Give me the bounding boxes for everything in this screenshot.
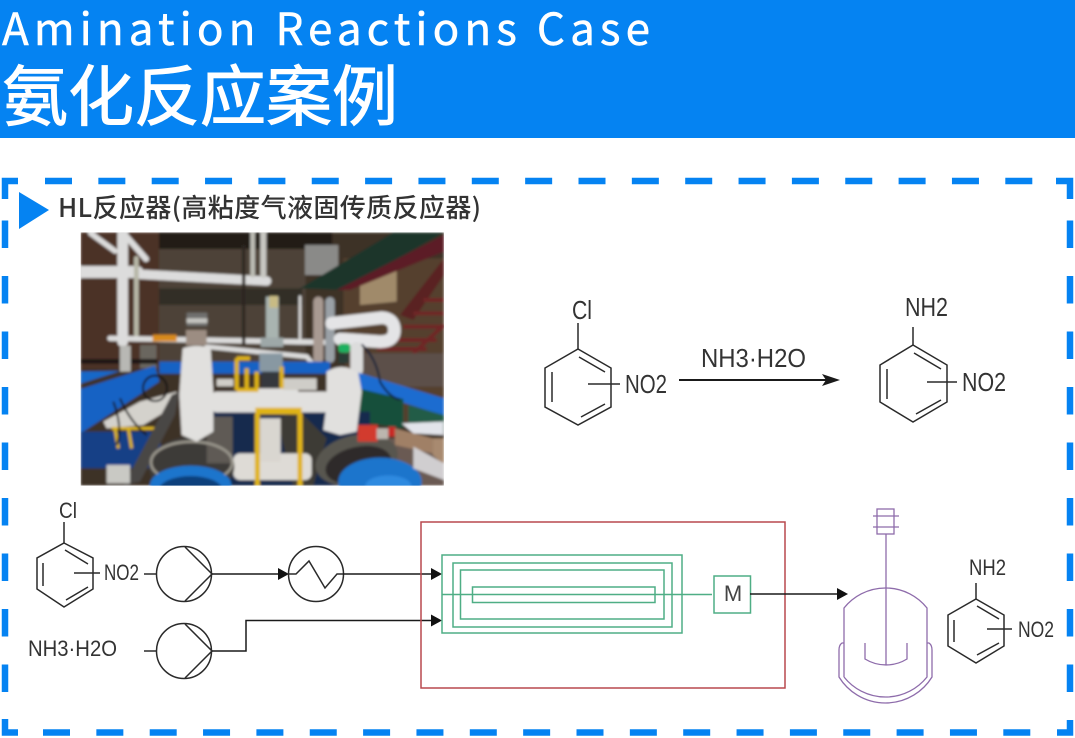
feed molecule: NO2	[104, 560, 139, 585]
large flanges	[148, 438, 236, 480]
pipes white upper	[81, 233, 394, 370]
dashed panel border	[5, 181, 1070, 732]
process flow diagram	[28, 498, 1054, 703]
mixer box M: M	[724, 581, 742, 606]
title: Chinese: 氨化反应案例	[2, 44, 398, 140]
yellow supports	[237, 358, 302, 486]
reactant molecule: Cl	[572, 295, 592, 325]
arrow: mixer to stirred tank	[750, 588, 848, 600]
product molecule	[880, 292, 1006, 422]
product molecule	[948, 555, 1054, 663]
reaction arrow with reagent: NH3·H2O	[701, 343, 806, 373]
feed label: ammonia water: NH3·H2O	[28, 636, 117, 661]
pump 1	[144, 546, 212, 602]
section heading: HL反应器(高粘度气液固传质反应器)	[58, 188, 481, 225]
product molecule: NO2	[1018, 617, 1054, 642]
stirred tank vessel	[839, 509, 932, 703]
section marker triangle	[19, 192, 49, 229]
arrow: exchanger to reactor	[343, 568, 442, 580]
feed molecule	[37, 498, 139, 607]
central dark area	[213, 412, 370, 486]
reaction scheme	[545, 292, 1006, 425]
reactant molecule	[545, 295, 667, 425]
product molecule: NO2	[962, 367, 1006, 397]
blue rails	[81, 371, 120, 384]
reaction arrow with reagent	[679, 343, 840, 386]
insulated reactor columns	[179, 346, 362, 442]
arrow: pump 1 to heat exchanger	[212, 568, 289, 580]
pump 2	[144, 624, 212, 678]
product molecule: NH2	[969, 555, 1006, 580]
HL reactor: nested green channels	[442, 555, 712, 633]
red enclosure	[421, 522, 785, 688]
header banner	[0, 0, 1075, 140]
photo: HL reactor installation	[81, 232, 444, 506]
steel fittings	[187, 313, 207, 326]
reactant molecule: NO2	[625, 369, 667, 399]
heat exchanger	[288, 546, 344, 602]
boxes bottom right	[358, 425, 378, 442]
product molecule: NH2	[905, 292, 948, 322]
mixer box M	[714, 576, 750, 613]
feed molecule: Cl	[59, 498, 77, 523]
arrow: pump 2 to reactor	[212, 614, 442, 651]
lower left machinery	[81, 432, 161, 468]
